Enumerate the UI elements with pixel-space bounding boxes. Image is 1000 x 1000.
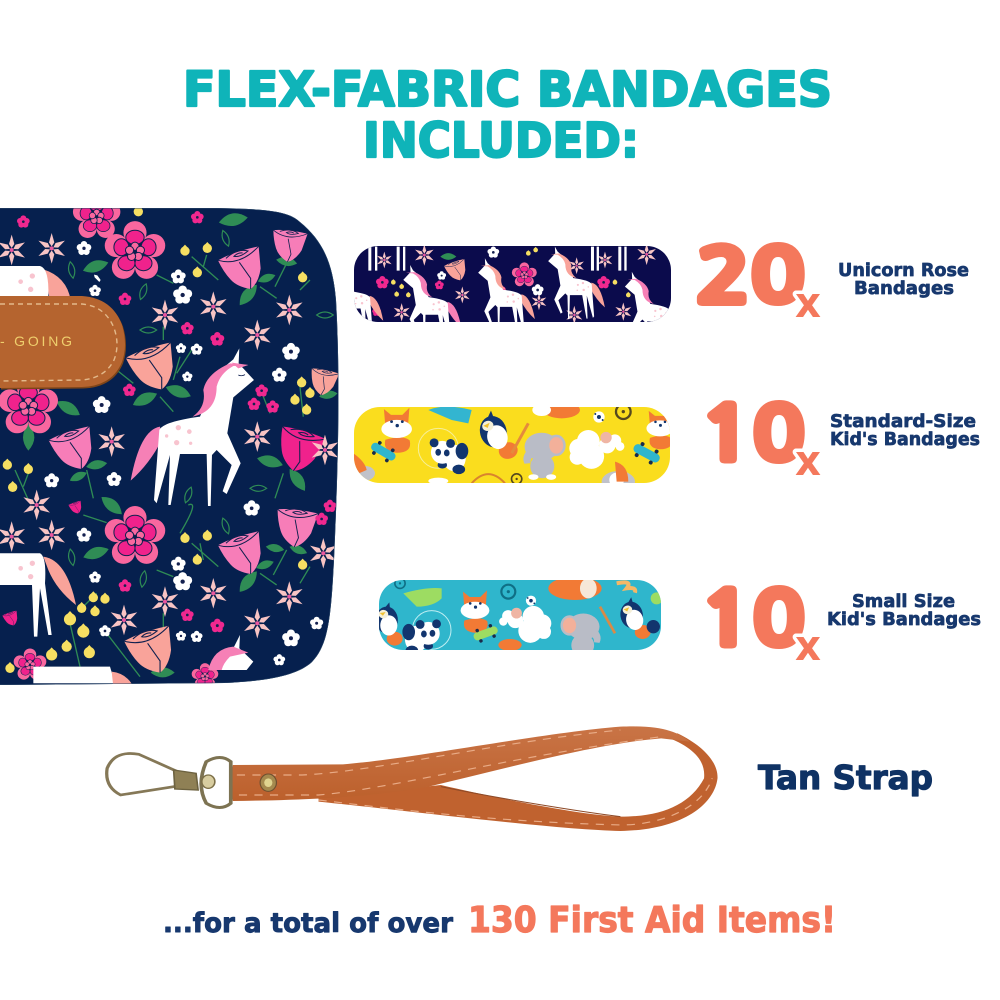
- wrist strap with clasp: [107, 726, 718, 831]
- count: 20x unicorn rose: 20: [696, 241, 805, 314]
- label: unicorn rose bandages: [838, 260, 969, 299]
- band florals: [372, 244, 657, 324]
- panel: unicorn rose pouch: [0, 193, 345, 690]
- strap front band: [231, 726, 690, 801]
- bandage: small size kids: [379, 580, 661, 650]
- label: standard-size kids bandages: Standard-Size: [830, 411, 976, 432]
- band 2 characters: [354, 407, 670, 483]
- label: tan strap: Tan Strap: [758, 758, 933, 797]
- count: 20x unicorn rose: x: [795, 278, 821, 327]
- count: 10x small: 10: [700, 584, 805, 657]
- bandage: unicorn rose: [354, 246, 671, 322]
- leather tab with logo: - GOING: [0, 333, 72, 349]
- footer line: ...for a total of over: [163, 908, 454, 939]
- label: unicorn rose bandages: Unicorn Rose: [838, 260, 969, 281]
- strap back band: [318, 733, 718, 831]
- partial unicorn, bottom: [33, 635, 253, 687]
- label: standard-size kids bandages: Kid's Bandages: [830, 429, 980, 450]
- footer line: 130 First Aid Items!: [468, 900, 836, 941]
- count: 20x unicorn rose: [696, 241, 821, 327]
- footer line: [163, 900, 836, 941]
- title: INCLUDED:: [363, 113, 639, 169]
- count: 10x small: [700, 584, 821, 670]
- band 3 characters: [379, 580, 661, 650]
- bandage: standard-size kids: [354, 407, 670, 483]
- main unicorn: [131, 348, 254, 506]
- count: 10x standard: x: [795, 436, 821, 485]
- band unicorns: [326, 247, 683, 346]
- leather tab with logo: [0, 296, 126, 390]
- title: [183, 62, 832, 169]
- label: small size kids bandages: [827, 591, 981, 630]
- pouch floral pattern: [0, 193, 340, 689]
- count: 10x standard: 10: [700, 399, 805, 472]
- label: small size kids bandages: Kid's Bandages: [827, 609, 981, 630]
- count: 10x small: x: [795, 621, 821, 670]
- white highlight on pouch corner: [94, 275, 101, 282]
- partial unicorn, lower left: [0, 553, 76, 637]
- count: 10x standard: [700, 399, 821, 485]
- title: FLEX-FABRIC BANDAGES: [183, 62, 832, 118]
- partial unicorn, upper left: [0, 266, 70, 296]
- label: standard-size kids bandages: [830, 411, 980, 450]
- label: small size kids bandages: Small Size: [852, 591, 955, 612]
- metal clasp: [107, 754, 231, 807]
- label: unicorn rose bandages: Bandages: [854, 278, 954, 299]
